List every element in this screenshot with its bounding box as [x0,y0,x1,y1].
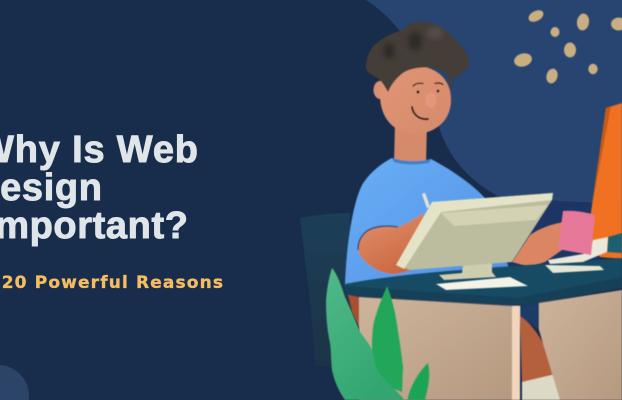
monitor back [396,193,553,270]
title [0,129,198,247]
mug [558,211,595,255]
middle leaf [372,286,403,392]
left arm and sleeve [358,213,430,274]
person [345,22,564,300]
thigh behind desk [348,295,359,327]
orange monitor [588,103,622,259]
stylus [422,193,430,208]
face: brows, eyes, nose and smile [412,83,443,119]
right arm [512,222,564,267]
desk right panel [539,290,622,400]
desk panel edge [512,306,520,400]
background shape: corner circle [0,365,29,400]
beige monitor [396,193,553,280]
ear [374,81,386,99]
white cuff and hand [548,237,608,264]
head [380,66,451,134]
decorative dots [513,8,622,85]
collar [392,158,431,164]
monitor stand [439,246,496,280]
neck [394,122,427,165]
sock [522,374,562,400]
paper on desk [436,277,528,290]
desk left panel [359,297,512,400]
teal sleeve [607,233,622,253]
lower leg [520,316,556,382]
hair [366,22,469,95]
small leaf [408,363,429,400]
desk top [345,258,622,400]
large leaf [326,268,403,400]
chair [300,213,350,368]
gap behind desk [520,303,539,330]
torso shirt [345,158,520,300]
background patch behind arm [500,198,600,270]
background shape: lighter blue curve [366,0,622,203]
small paper stack [545,265,604,273]
plant [326,268,429,400]
